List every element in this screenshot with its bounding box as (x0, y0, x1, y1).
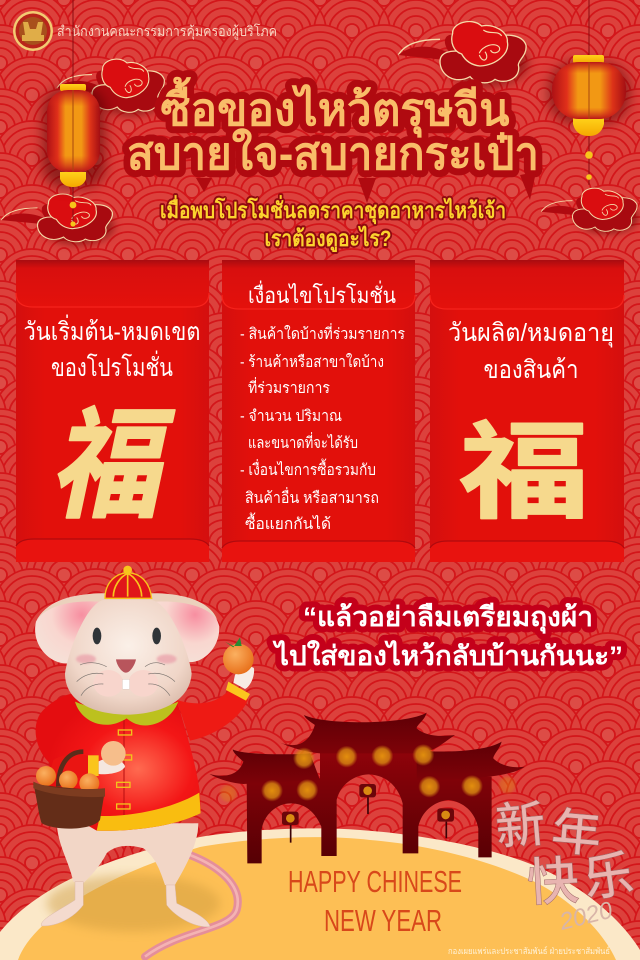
logo: agency seal (13, 11, 53, 51)
chinese greeting: xin nian kuai le 2020: 2020 (556, 897, 616, 936)
title: ซื้อของไหว้ตรุษจีน (160, 76, 510, 138)
list: conditions: - สินค้าใดบ้างที่ร่วมรายการ (240, 323, 405, 343)
list: conditions: สินค้าอื่น หรือสามารถ (245, 487, 379, 507)
panel: production and expiry dates: ของสินค้า (484, 356, 578, 384)
head (65, 600, 192, 715)
hat brim (37, 593, 217, 620)
cloud: top right (398, 22, 528, 87)
frog buttons (117, 730, 132, 809)
calligraphy: fu right (459, 387, 589, 540)
subtitle: เราต้องดูอะไร? (264, 225, 392, 253)
greeting: happy chinese new year: HAPPY CHINESE (288, 864, 462, 899)
greeting: happy chinese new year (288, 864, 462, 938)
panel: promotion conditions (222, 260, 415, 562)
ears (35, 594, 107, 663)
list: conditions: และขนาดที่จะได้รับ (248, 432, 358, 452)
list: conditions: ที่ร่วมรายการ (248, 377, 330, 397)
ground: cream and yellow hill (0, 828, 640, 960)
subtitle (160, 194, 506, 253)
lantern: right (548, 0, 630, 185)
chinese greeting: xin nian kuai le 2020: 新 (493, 796, 548, 856)
coat hem (97, 793, 201, 831)
panel: production and expiry dates: วันผลิต/หมดอายุ (448, 319, 614, 348)
quote: ไปใส่ของไหว้กลับบ้านกันนะ” (272, 640, 623, 671)
chinese greeting: xin nian kuai le 2020: 快 (526, 852, 581, 913)
list: conditions: - เงื่อนไขการซื้อรวมกับ (240, 458, 376, 479)
title (127, 76, 539, 203)
panel: promotion dates: ของโปรโมชั่น (51, 350, 173, 382)
title: ซื้อของไหว้ตรุษจีน (160, 76, 510, 138)
calligraphy: fu left (43, 368, 190, 542)
list: conditions: ซื้อแยกกันได้ (245, 512, 331, 533)
credit line: กองเผยแพร่และประชาสัมพันธ์ ฝ่ายประชาสัมพันธ์ (448, 945, 610, 956)
whiskers (77, 663, 175, 696)
chinese greeting: xin nian kuai le 2020: 乐 (580, 845, 637, 908)
eyes (93, 628, 101, 644)
chinese greeting: xin nian kuai le 2020 (493, 796, 637, 936)
panel: promotion dates: วันเริ่มต้น-หมดเขต (24, 314, 200, 346)
panel: production and expiry dates (430, 260, 624, 562)
cheeks (76, 654, 96, 664)
shadow (47, 875, 220, 932)
cloud: lower left (1, 194, 114, 245)
basket with oranges (58, 752, 83, 787)
cloud: upper left (57, 59, 166, 116)
list: conditions: - ร้านค้าหรือสาขาใดบ้าง (240, 353, 384, 371)
gate illustration (209, 713, 525, 863)
panel: promotion dates (16, 260, 209, 562)
raised arm with orange (177, 691, 248, 741)
quote (272, 602, 623, 671)
tail (145, 855, 238, 957)
list: conditions: - จำนวน ปริมาณ (240, 408, 342, 425)
lantern: left (42, 0, 106, 228)
cloud: lower right (541, 188, 639, 234)
subtitle: เมื่อพบโปรโมชั่นลดราคาชุดอาหารไหว้เจ้า (160, 194, 506, 225)
nose and teeth (116, 659, 136, 673)
greeting: happy chinese new year: NEW YEAR (324, 903, 442, 938)
collar (75, 702, 178, 725)
chinese greeting: xin nian kuai le 2020: 年 (549, 803, 604, 863)
muzzle (93, 670, 123, 697)
panel: promotion conditions: เงื่อนไขโปรโมชั่น (248, 280, 396, 308)
legs and feet (57, 823, 198, 885)
title: สบายใจ-สบายกระเป๋า (127, 127, 539, 179)
agency name: สำนักงานคณะกรรมการคุ้มครองผู้บริโภค (57, 23, 277, 40)
hat (105, 573, 152, 598)
quote: “แล้วอย่าลืมเตรียมถุงผ้า (303, 602, 593, 634)
coat (36, 693, 201, 831)
list: conditions (240, 323, 405, 533)
hand with peeled orange (50, 754, 88, 778)
mouse mascot (33, 566, 254, 957)
title: สบายใจ-สบายกระเป๋า (127, 127, 539, 179)
